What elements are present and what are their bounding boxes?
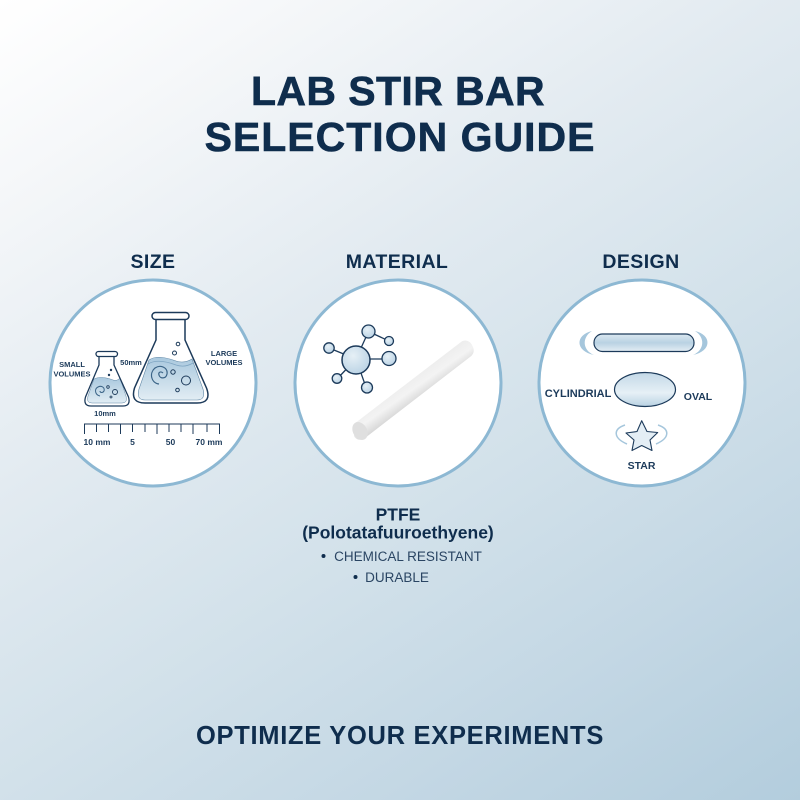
label: oval: OVAL — [684, 391, 713, 403]
label: 10mm: 10mm — [94, 409, 116, 418]
label: cylindrial: CYLINDRIAL — [545, 388, 612, 400]
bullet: chemical resistant: CHEMICAL RESISTANT — [334, 549, 482, 564]
title: SELECTION GUIDE — [205, 114, 595, 160]
icon: star — [616, 421, 667, 450]
icon: PTFE stir bar — [349, 341, 474, 443]
material name: (Polotatafuuroethyene) — [302, 522, 494, 542]
ruler labels: 50 — [166, 437, 175, 447]
panel: material — [295, 280, 501, 486]
panel: size — [50, 280, 256, 486]
label: large volumes: VOLUMES — [205, 358, 243, 367]
label: star: STAR — [628, 460, 656, 472]
label: large volumes: LARGE — [211, 349, 237, 358]
label: small volumes — [53, 360, 91, 378]
material description — [302, 504, 494, 585]
material circle — [295, 280, 501, 486]
panel: design — [539, 280, 745, 486]
icon: small flask — [85, 352, 129, 406]
design circle — [539, 280, 745, 486]
icon: oval bar — [614, 372, 676, 406]
ruler labels — [84, 437, 223, 447]
footer tagline: OPTIMIZE YOUR EXPERIMENTS — [196, 722, 604, 750]
label: 50mm: 50mm — [120, 358, 142, 367]
icon: large flask — [133, 312, 208, 403]
size circle — [50, 280, 256, 486]
label: large volumes — [205, 349, 243, 367]
title: LAB STIR BAR — [251, 68, 545, 114]
title — [205, 68, 595, 160]
icon: cylindrical bar — [579, 331, 708, 355]
material name — [302, 504, 494, 542]
material name: PTFE — [376, 504, 420, 524]
icon: molecule — [324, 325, 396, 393]
ruler labels: 10 mm — [84, 437, 111, 447]
label: small volumes: VOLUMES — [53, 370, 91, 378]
ruler — [84, 424, 223, 447]
heading: design: DESIGN — [602, 251, 680, 273]
heading: size: SIZE — [131, 251, 175, 273]
heading: material: MATERIAL — [346, 251, 448, 273]
ruler labels: 70 mm — [196, 437, 223, 447]
ruler labels: 5 — [130, 437, 135, 447]
bullet: durable: DURABLE — [365, 570, 429, 585]
label: small volumes: SMALL — [59, 360, 85, 369]
